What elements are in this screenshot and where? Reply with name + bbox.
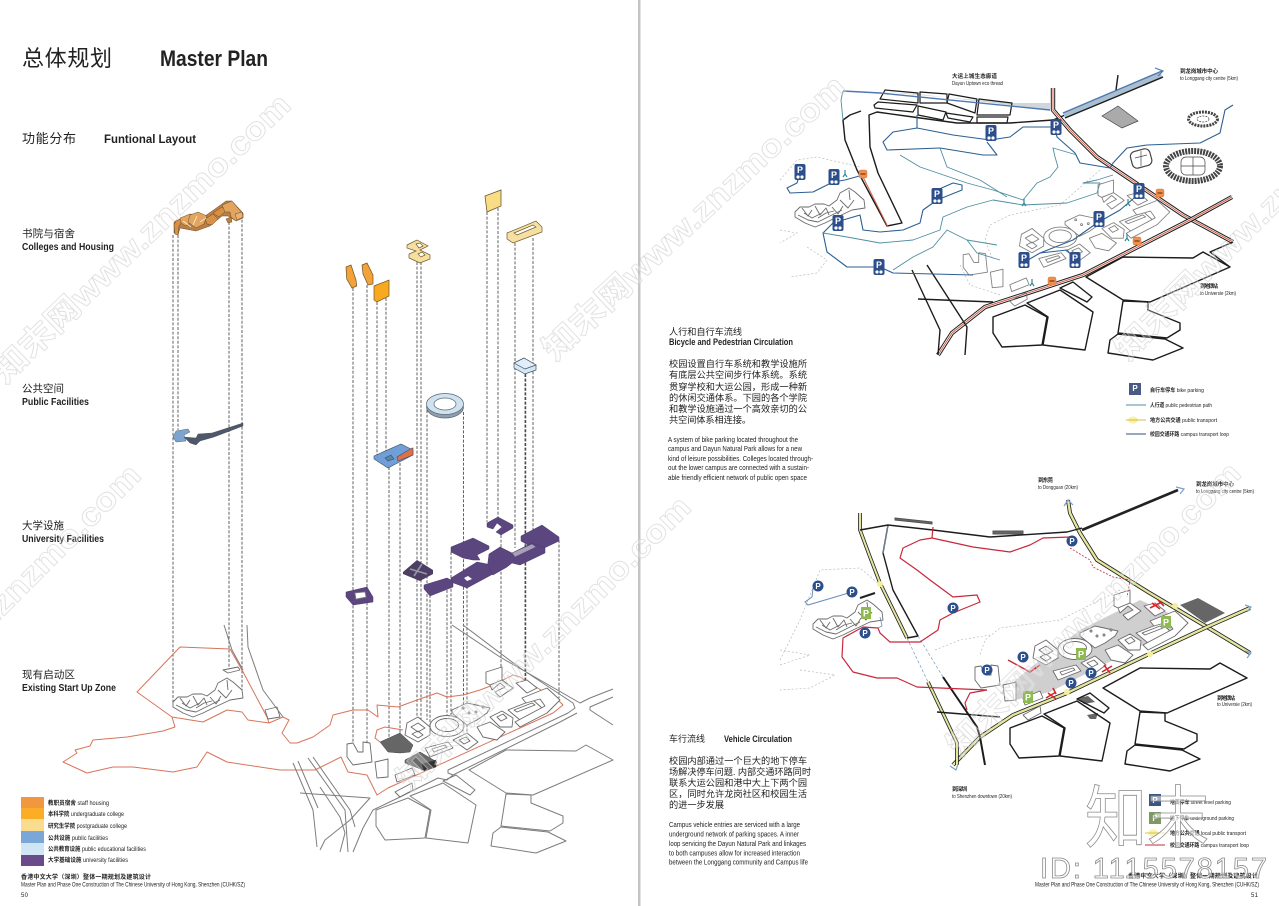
top map: eco lots (874, 90, 1012, 123)
text block: bicycle and pedestrian circulation: kind of leisure possibilities. Colleges located through- (668, 456, 814, 463)
top map: labels: Dayun Uptown eco thread (952, 81, 1003, 87)
bottom map: surface parking icons: P (849, 588, 855, 597)
text block: bicycle and pedestrian circulation: campus and Dayun Natural Park allows for a new (668, 446, 803, 453)
top map: buildings (963, 180, 1170, 306)
bottom map: surface parking icons: P (1020, 653, 1026, 662)
label: public facilities: 公共空间 (22, 382, 64, 395)
bottom map: vehicle circulation (780, 476, 1254, 800)
top map: roads (843, 68, 1233, 355)
bottom map: labels: 到深圳 (952, 785, 967, 793)
title (22, 46, 268, 71)
text block: bicycle and pedestrian circulation: able friendly efficient network of public open space (668, 475, 807, 482)
label: existing start up zone: 现有启动区 (22, 668, 75, 681)
footer right: 51 (1251, 893, 1259, 899)
legend: land use: 研究生学院 postgraduate college (48, 822, 128, 830)
3d block: postgraduate star (407, 240, 430, 263)
3d block: public walkway (173, 423, 243, 445)
top map: bike parking icons: P (831, 170, 837, 180)
bottom map: surface parking icons: P (1069, 537, 1075, 546)
text block: bicycle and pedestrian circulation: 人行和自行车流线 (669, 326, 742, 337)
label: existing start up zone: Existing Start Up Zone (22, 683, 116, 694)
legend: vehicle map: 地下停车 underground parking (1170, 814, 1234, 822)
footer left: 50 (21, 893, 29, 899)
top map: labels (952, 67, 1238, 297)
label: existing start up zone (22, 668, 116, 694)
top map: gray eco band (883, 92, 1050, 110)
section heading: functional layout: Funtional Layout (104, 132, 196, 146)
top map: start-up buildings (795, 188, 865, 227)
3d block: public building (374, 444, 413, 468)
top map: bike parking icons (794, 119, 1144, 275)
bottom map: road blocks (1010, 663, 1247, 771)
dark highlighted buildings (380, 733, 437, 771)
top map: bike parking icons: P (797, 165, 803, 175)
text block: vehicle circulation: 的进一步发展 (669, 799, 724, 810)
bottom map: park boundary (780, 568, 1120, 690)
label: colleges and housing (22, 227, 114, 253)
legend: vehicle map: P (1152, 814, 1158, 823)
top map: labels: to Longgang city centre (5km) (1180, 76, 1238, 82)
bottom map: underground parking icons: P (1163, 618, 1169, 628)
footer left: Master Plan and Phase One Construction of The Chinese University of Hong Kong, Shenzhen (CUHK/SZ) (21, 882, 245, 888)
top map: bike parking icons: P (1136, 184, 1142, 194)
bottom map: surface parking icons: P (862, 629, 868, 638)
text block: vehicle circulation: 区，同时允许龙岗社区和校园生活 (669, 788, 807, 799)
title: Master Plan (160, 46, 268, 71)
3d blocks: university facilities (346, 517, 559, 605)
footer right (1035, 872, 1259, 899)
start-up zone buildings (173, 678, 243, 717)
top map: park boundary (780, 157, 1100, 295)
campus buildings (347, 667, 560, 797)
label: university facilities (22, 519, 104, 545)
top map: bus stops (859, 170, 1164, 285)
top map: bike parking icons: P (934, 189, 940, 199)
3d block: ring (426, 394, 464, 418)
title: 总体规划 (22, 46, 112, 71)
legend: vehicle map: 地面停车 street level parking (1170, 798, 1231, 806)
3d block: colleges and housing (174, 201, 243, 235)
top map: labels: 到地铁站 (1200, 282, 1218, 290)
text block: vehicle circulation: 校园内部通过一个巨大的地下停车 (669, 755, 807, 766)
bottom map: underground parking icons: P (1025, 692, 1031, 702)
watermark: logo and id: ID: 1115578157 (1040, 853, 1267, 885)
bottom map: start-up buildings (813, 600, 883, 639)
bottom map: surface parking icons: P (815, 582, 821, 591)
watermark: site url: 知末网www.znzmo.com (939, 455, 1248, 763)
text block: bicycle and pedestrian circulation: 有底层公共空间步行体系统。系统 (669, 369, 807, 380)
legend: vehicle map: P (1152, 796, 1158, 805)
top map: bike parking icons: P (1072, 253, 1078, 263)
text block: vehicle circulation: between the Longgang community and Campus life (669, 860, 808, 866)
top map: bike parking icons: P (988, 126, 994, 136)
gray roads left (224, 625, 613, 852)
top map: bike parking icons: P (876, 260, 882, 270)
exploded axonometric projection lines, left column (173, 215, 242, 703)
text block: vehicle circulation: Campus vehicle entries are serviced with a large (669, 822, 800, 829)
text block: bicycle and pedestrian circulation: Bicycle and Pedestrian Circulation (669, 337, 793, 348)
legend: bike map: 人行道 public pedestrian path (1150, 401, 1212, 409)
legend: land use: 教职员宿舍 staff housing (48, 799, 109, 807)
text block: vehicle circulation: 场解决停车问题. 内部交通环路同时 (669, 766, 811, 777)
label: public facilities: Public Facilities (22, 397, 89, 408)
text block: bicycle and pedestrian circulation: 和教学设施通过一个高效亲切的公 (669, 403, 807, 414)
3d block: postgraduate long (507, 221, 542, 243)
bottom map: surface parking icons: P (1068, 679, 1074, 688)
bottom map: roads (860, 487, 1251, 770)
text block: bicycle and pedestrian circulation: 贯穿学校和大运公园，形成一种新 (669, 381, 807, 392)
bottom map: surface parking icons: P (950, 604, 956, 613)
bottom map: underground parking icons (861, 607, 1171, 703)
legend: bike map: 校园交通环路 campus transport loop (1150, 430, 1229, 438)
legend: bike map (1126, 383, 1229, 438)
label: university facilities: University Facilities (22, 534, 104, 545)
text block: vehicle circulation (669, 733, 811, 866)
legend: bike map: 自行车停车 bike parking (1150, 386, 1204, 394)
legend: vehicle map: 地方公共交通 local public transport (1170, 829, 1246, 837)
top map: bicycle and pedestrian circulation (780, 67, 1238, 360)
top map: pedestrian markers (843, 170, 1130, 286)
text block: bicycle and pedestrian circulation: 校园设置自行车系统和教学设施所 (669, 358, 807, 369)
label: university facilities: 大学设施 (22, 519, 64, 532)
text block: vehicle circulation: Vehicle Circulation (724, 734, 792, 745)
bottom map: underground parking icons: P (1078, 650, 1084, 660)
footer left (21, 873, 245, 899)
existing small buildings (223, 667, 280, 719)
bottom map: labels: to Longgang city centre (5km) (1196, 489, 1254, 495)
legend: land use (21, 797, 146, 866)
top map: bike parking icons: P (835, 216, 841, 226)
legend: land use: 公共设施 public facilities (48, 834, 108, 842)
footer right: 香港中文大学（深圳）整体一期规划及建筑设计 (1128, 872, 1258, 880)
section heading: functional layout: 功能分布 (22, 131, 76, 146)
legend: vehicle map (1145, 794, 1249, 849)
text block: vehicle circulation: loop servicing the Dayun Natural Park and linkages (669, 841, 806, 848)
label: colleges and housing: 书院与宿舍 (22, 227, 76, 240)
bottom map: labels (952, 476, 1254, 800)
bottom map: labels: 到东莞 (1038, 476, 1053, 484)
top map: labels: 大运上城生态廊道 (952, 72, 997, 80)
text block: bicycle and pedestrian circulation: 的休闲交通体系。下园的各个学院 (669, 392, 807, 403)
top map: pedestrian and bike routes (787, 91, 1233, 275)
text block: bicycle and pedestrian circulation (668, 326, 814, 482)
top map: labels: to Universie (2km) (1200, 291, 1236, 297)
text block: bicycle and pedestrian circulation: A system of bike parking located throughout the (668, 437, 798, 444)
bottom map: ground tone (1000, 600, 1188, 700)
text block: bicycle and pedestrian circulation: 共空间体系相连接。 (669, 414, 751, 425)
watermark: logo and id: 知末 (1085, 781, 1209, 857)
bottom map: underground parking icons: P (863, 608, 869, 618)
bottom map: surface parking icons (812, 536, 1096, 688)
text block: bicycle and pedestrian circulation: out the lower campus are connected with a sustain- (668, 465, 810, 472)
bottom map: transit stops (877, 581, 1178, 695)
text block: vehicle circulation: to both campuses allow for increased interaction (669, 850, 800, 858)
legend: bike map: 地方公共交通 public transport (1150, 416, 1217, 424)
bottom map: surface parking icons: P (984, 666, 990, 675)
text block: vehicle circulation: 联系大运公园和港中大上下两个园 (669, 777, 807, 788)
bottom map: labels: to Shenzhen downtown (20km) (952, 794, 1012, 800)
bottom map: circulation loop (805, 527, 1164, 710)
top map: bike parking icons: P (1021, 253, 1027, 263)
bottom map: surface parking icons: P (1088, 669, 1094, 678)
legend: land use: 公共教育设施 public educational facilities (48, 845, 146, 853)
text block: vehicle circulation: 车行流线 (669, 733, 705, 744)
watermark: site url: 知末网www.znzmo.com (535, 68, 852, 367)
section heading: functional layout (22, 131, 196, 146)
bottom map: labels: to Universie (2km) (1217, 702, 1252, 708)
watermark: logo and id (1040, 781, 1267, 885)
label: colleges and housing: Colleges and Housing (22, 242, 114, 253)
site boundary outline (63, 647, 563, 795)
top map: labels: 到龙岗城市中心 (1180, 67, 1218, 75)
bottom map: campus buildings (975, 590, 1188, 720)
exploded axonometric projection lines, centre column (353, 208, 559, 753)
top map: stadium patterns (1102, 106, 1220, 181)
bottom map: labels: 到龙岗城市中心 (1196, 480, 1234, 488)
3d block: educational box (514, 358, 536, 374)
legend: land use: 大学基础设施 university facilities (48, 856, 128, 864)
3d block: staff housing (346, 263, 389, 302)
3d block: postgraduate square (485, 190, 501, 212)
bottom map: labels: 到地铁站 (1217, 694, 1235, 702)
top map: bike parking icons: P (1053, 120, 1059, 130)
top map: bike parking icons: P (1096, 212, 1102, 222)
legend: land use: 本科学院 undergraduate college (48, 810, 125, 818)
legend: vehicle map: 校园交通环路 campus transport loop (1170, 841, 1249, 849)
text block: vehicle circulation: underground network of parking spaces. A inner (669, 832, 800, 838)
label: public facilities (22, 382, 89, 408)
footer left: 香港中文大学（深圳）整体一期规划及建筑设计 (21, 873, 151, 881)
watermark: site url: 知末网www.znzmo.com (389, 489, 698, 797)
top map: road blocks (993, 252, 1230, 360)
bottom map: labels: to Dongguan (20km) (1038, 485, 1078, 491)
bottom map: dark parking plot (1180, 598, 1225, 623)
bottom map: dark plots (895, 518, 1098, 719)
left map road blocks (376, 745, 613, 853)
legend: bike map: P (1132, 384, 1138, 393)
